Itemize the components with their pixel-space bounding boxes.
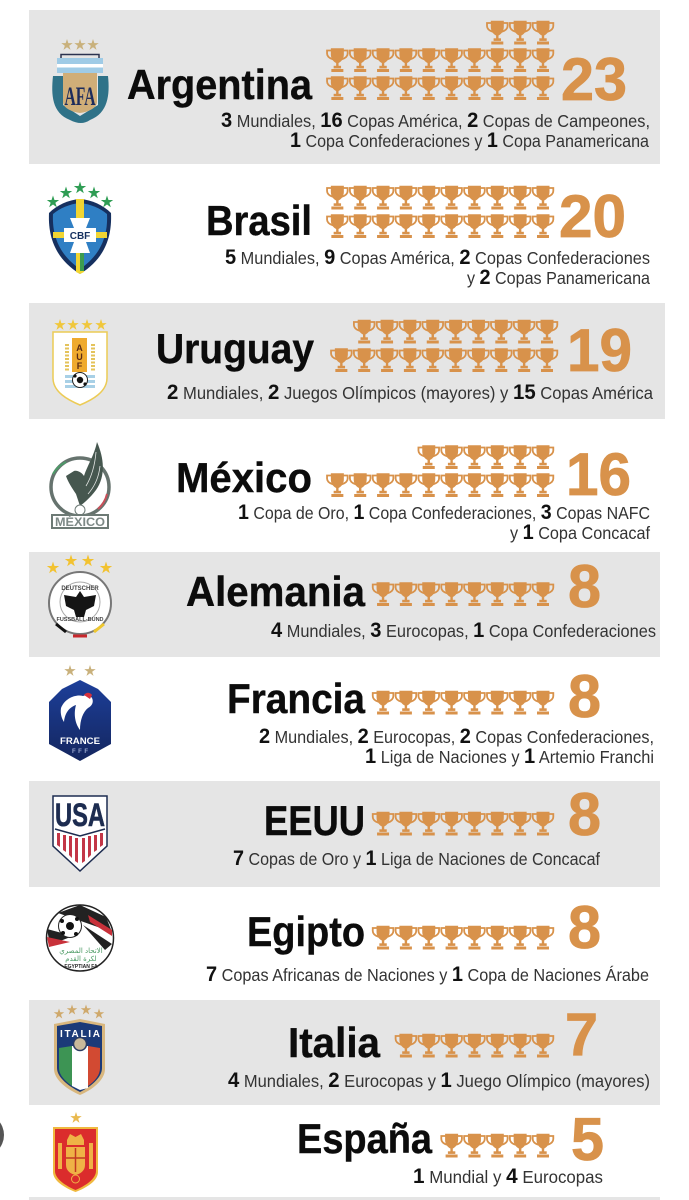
icon: FMF crest: MÉXICO (55, 514, 105, 529)
description: Uruguay titles: 2 Mundiales, 2 Juegos Olímpicos (mayores) y 15 Copas América (167, 380, 653, 404)
heading: Argentina: Argentina (127, 61, 313, 108)
row: Brasil (47, 182, 650, 289)
heading: Brasil: Brasil (206, 197, 312, 244)
description: México titles: 1 Copa de Oro, 1 Copa Confederaciones, 3 Copas NAFC (238, 500, 650, 524)
icon: DFB crest (47, 554, 112, 636)
trophies: 8 (373, 691, 553, 714)
trophies: 20 (327, 186, 553, 238)
trophies: 8 (373, 582, 553, 606)
description: España titles: 1 Mundial y 4 Eurocopas (413, 1164, 603, 1188)
icon: FFF crest: FRANCE (60, 736, 100, 746)
trophies: 5 (441, 1134, 553, 1158)
panel background: Italia (29, 1000, 660, 1105)
row: EEUU (29, 781, 660, 887)
description: México titles: y 1 Copa Concacaf (510, 520, 650, 544)
heading: Francia: Francia (227, 675, 366, 722)
description: Brasil titles: 5 Mundiales, 9 Copas América, 2 Copas Confederaciones (225, 245, 650, 269)
description: Argentina titles (221, 108, 650, 152)
heading: EEUU: EEUU (264, 797, 365, 844)
heading: España: España (297, 1115, 433, 1162)
panel background: Argentina (29, 10, 660, 164)
description: Francia titles: 1 Liga de Naciones y 1 Artemio Franchi (365, 744, 654, 768)
row: México (51, 441, 650, 544)
icon: FIGC crest: ITALIA (60, 1029, 100, 1040)
icon: AUF crest: A (76, 343, 83, 353)
row: Uruguay (29, 303, 665, 419)
icon: FFF crest: FFF (72, 749, 88, 755)
total: 7: 7 (565, 1001, 598, 1068)
row: Argentina (29, 10, 660, 164)
row: Francia (49, 663, 654, 768)
panel background: Uruguay (29, 303, 665, 419)
panel background: EEUU (29, 781, 660, 887)
total: 23: 23 (561, 46, 627, 113)
trophies: 8 (373, 812, 553, 836)
description: Francia titles: 2 Mundiales, 2 Eurocopas, 2 Copas Confederaciones, (259, 724, 654, 748)
icon: CBF crest (47, 182, 113, 274)
icon: RFEF crest (53, 1112, 98, 1192)
total: 19: 19 (567, 317, 632, 384)
trophies: 16 (327, 445, 553, 497)
icon: AFA crest (52, 39, 109, 123)
total: 8: 8 (568, 553, 601, 620)
total: 5: 5 (571, 1106, 604, 1173)
row: Egipto (46, 894, 649, 986)
description: Alemania titles: 4 Mundiales, 3 Eurocopas, 1 Copa Confederaciones (271, 618, 656, 642)
description: Italia titles: 4 Mundiales, 2 Eurocopas y 1 Juego Olímpico (mayores) (228, 1068, 650, 1092)
total: 8: 8 (568, 663, 601, 730)
icon: EFA crest (46, 905, 114, 971)
total: 8: 8 (568, 781, 601, 848)
description: Argentina titles: 1 Copa Confederaciones y 1 Copa Panamericana (290, 128, 649, 152)
description: Brasil titles: y 2 Copas Panamericana (467, 265, 650, 289)
row: Alemania (29, 552, 660, 657)
icon: AUF crest: F (77, 361, 83, 371)
next row panel edge (29, 1197, 660, 1200)
trophies: 23 (327, 21, 553, 100)
icon: USA crest: USA (55, 797, 105, 833)
description: Francia titles (259, 724, 654, 768)
description: EEUU titles: 7 Copas de Oro y 1 Liga de Naciones de Concacaf (233, 846, 600, 870)
icon: AUF crest (53, 319, 107, 405)
row: España (53, 1106, 604, 1192)
total: 16: 16 (566, 441, 631, 508)
icon: AFA crest: AFA (64, 82, 96, 111)
icon: EFA crest: الاتحاد المصري (59, 947, 103, 955)
heading: Italia: Italia (288, 1019, 381, 1066)
description: Brasil titles (225, 245, 650, 289)
panel background: Alemania (29, 552, 660, 657)
icon: FIGC crest (54, 1004, 105, 1095)
icon: DFB crest: FUSSBALL-BUND (56, 617, 104, 623)
total: 8: 8 (568, 894, 601, 961)
heading: México: México (176, 454, 312, 501)
heading: Alemania: Alemania (186, 568, 366, 615)
description: Egipto titles: 7 Copas Africanas de Naciones y 1 Copa de Naciones Árabe (206, 962, 649, 986)
icon: EFA crest: EGYPTIAN FA (64, 964, 98, 970)
icon: CBF crest: CBF (70, 231, 90, 242)
trophies: 7 (396, 1034, 553, 1058)
description: Argentina titles: 3 Mundiales, 16 Copas América, 2 Copas de Campeones, (221, 108, 650, 132)
heading: Uruguay: Uruguay (156, 325, 315, 372)
total: 20: 20 (559, 183, 626, 250)
trophies: 19 (331, 320, 557, 372)
trophies: 8 (373, 926, 553, 950)
icon: FFF crest (49, 665, 111, 761)
icon: EFA crest: لكرة القدم (65, 955, 97, 963)
icon: USA crest (53, 796, 107, 871)
icon: DFB crest: DEUTSCHER (61, 586, 99, 592)
partial dark circle at left edge (0, 1113, 4, 1157)
icon: FMF crest (51, 442, 109, 529)
description: México titles (238, 500, 650, 544)
icon: AUF crest: U (76, 352, 83, 362)
heading: Egipto: Egipto (247, 908, 365, 955)
row: Italia (29, 1000, 660, 1105)
